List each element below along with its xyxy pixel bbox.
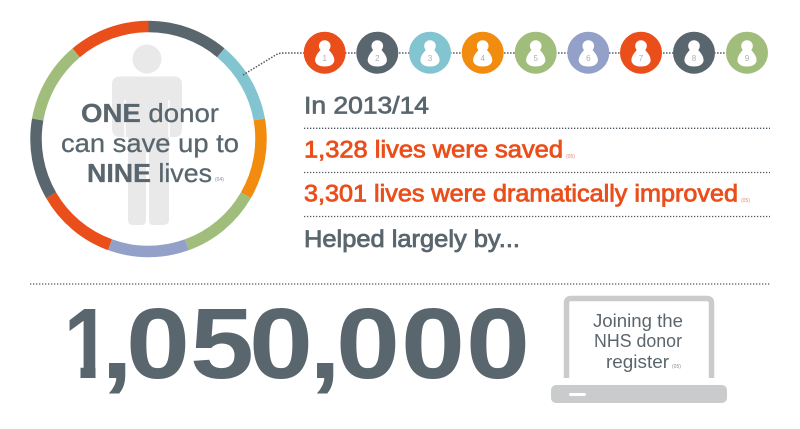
heading: in 2013/14: In 2013/14	[304, 92, 429, 120]
icon: laptop with register text	[551, 298, 727, 403]
big number: 1,050,000: ,050,000	[101, 287, 530, 399]
text: helped largely by: Helped largely by...	[304, 226, 520, 253]
icon: person 3	[409, 32, 451, 74]
icon: person 2	[356, 32, 398, 74]
icon: person 1: 1	[322, 54, 327, 63]
text: joining the nhs donor register: Joining the	[593, 311, 683, 331]
text: joining the nhs donor register: (05)	[672, 364, 681, 370]
icon: person 7: 7	[639, 54, 644, 63]
text: one donor can save up to nine lives: (04)	[215, 177, 224, 183]
connector: dotted line from ring to people	[243, 53, 760, 75]
text: one donor can save up to nine lives	[61, 98, 239, 188]
icon: human body silhouette	[112, 44, 182, 225]
icon: person 5: 5	[533, 54, 538, 63]
text: joining the nhs donor register: NHS donor	[594, 331, 682, 351]
icon: person 6: 6	[586, 54, 591, 63]
icon: person 3: 3	[428, 54, 433, 63]
stat: lives improved: 3,301 lives were dramatically improved	[304, 181, 738, 208]
icon: person 5	[515, 32, 557, 74]
icon: person 6	[567, 32, 609, 74]
big number: 1,050,000: 1	[64, 287, 111, 400]
stat: lives improved: (05)	[741, 198, 750, 204]
icon: person 1	[304, 32, 346, 74]
chart: nine segment donor ring	[36, 26, 261, 251]
icon: person 4: 4	[480, 54, 485, 63]
icon: person 4	[462, 32, 504, 74]
text: one donor can save up to nine lives: NINE lives	[87, 158, 212, 188]
icon: person 9	[726, 32, 768, 74]
icon: person 7	[620, 32, 662, 74]
text: one donor can save up to nine lives: ONE donor	[81, 98, 219, 128]
text: joining the nhs donor register	[593, 311, 683, 372]
icon: person 9: 9	[745, 54, 750, 63]
icons: nine numbered people	[304, 32, 768, 74]
text: joining the nhs donor register: register	[606, 352, 669, 372]
icon: person 8	[673, 32, 715, 74]
icon: person 2: 2	[375, 54, 380, 63]
icon: person 8: 8	[692, 54, 697, 63]
text: one donor can save up to nine lives: can save up to	[61, 128, 239, 158]
stat: lives saved: 1,328 lives were saved	[304, 137, 563, 164]
stat: lives saved: (05)	[566, 154, 575, 160]
